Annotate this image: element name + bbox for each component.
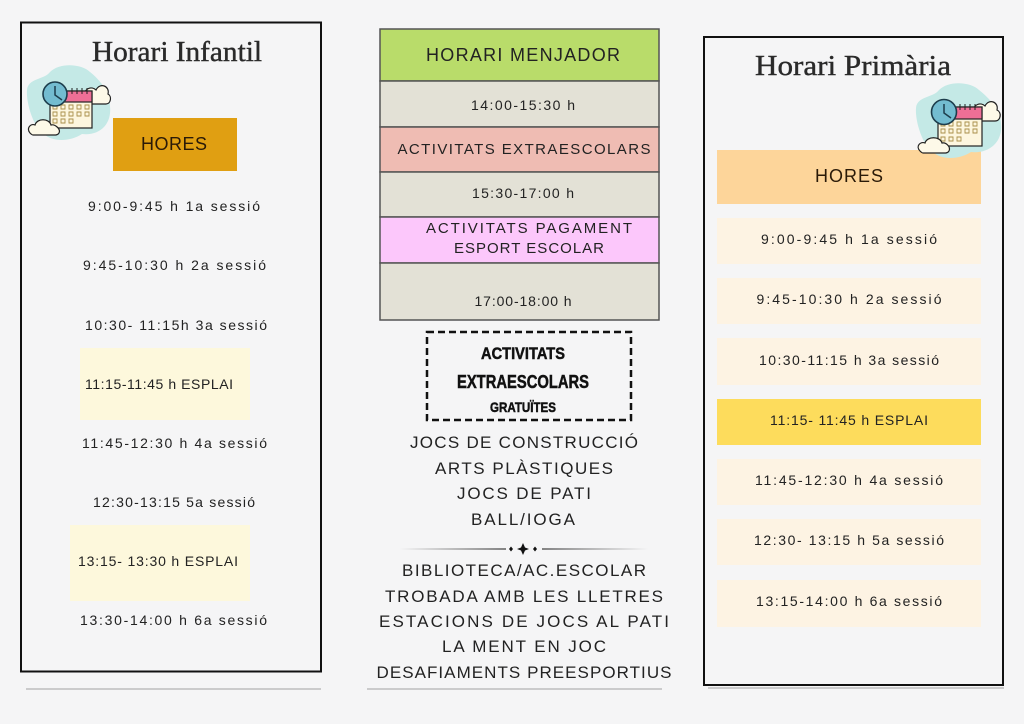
schedule: sessions (717, 218, 981, 627)
panel frame (21, 22, 321, 672)
schedule: sessions: 12:30-13:15 5a sessió (93, 494, 255, 510)
schedule: sessions: 11:15-11:45 h ESPLAI (85, 376, 233, 392)
schedule: sessions (70, 198, 267, 628)
schedule: sessions: 11:45-12:30 h 4a sessió (82, 435, 267, 451)
row: 15:30-17:00 h (380, 172, 659, 217)
row: 14:00-15:30 h: 14:00-15:30 h (471, 97, 575, 113)
icon: clock and calendar (916, 83, 1001, 158)
header: HORES: HORES (141, 134, 207, 154)
schedule: sessions: 13:30-14:00 h 6a sessió (80, 612, 267, 628)
text block: other activities: LA MENT EN JOC (442, 637, 606, 656)
schedule: sessions: 11:15- 11:45 h ESPLAI (770, 412, 928, 428)
text block: other activities: TROBADA AMB LES LLETRES (385, 587, 663, 606)
panel: Horari Menjador table (380, 29, 659, 320)
text block: free activities: BALL/IOGA (471, 510, 576, 529)
text block: other activities: BIBLIOTECA/AC.ESCOLAR (402, 561, 646, 580)
callout: Activitats extraescolars gratuïtes (427, 332, 631, 420)
panel: Horari Infantil (21, 22, 321, 672)
highlight: esplai (717, 399, 981, 445)
schedule: sessions: 12:30- 13:15 h 5a sessió (754, 532, 944, 548)
heading: Horari Infantil: Horari Infantil (92, 36, 262, 68)
row: 17:00-18:00 h (380, 263, 659, 320)
schedule: sessions: 9:45-10:30 h 2a sessió (756, 291, 942, 307)
schedule: sessions: 10:30- 11:15h 3a sessió (85, 317, 267, 333)
row: ACTIVITATS PAGAMENT ESPORT ESCOLAR (380, 217, 659, 263)
text block: other activities: DESAFIAMENTS PREESPORTIUS (376, 663, 672, 682)
text block: other activities: ESTACIONS DE JOCS AL PATI (379, 612, 669, 631)
callout: Activitats extraescolars gratuïtes: GRATUÏTES (490, 399, 556, 415)
schedule: sessions: 9:00-9:45 h 1a sessió (88, 198, 260, 214)
row: HORARI MENJADOR: HORARI MENJADOR (426, 45, 620, 65)
header: HORES: HORES (815, 166, 883, 186)
row: ACTIVITATS EXTRAESCOLARS: ACTIVITATS EXTRAESCOLARS (398, 141, 650, 158)
header: HORES (717, 150, 981, 204)
text block: free activities: JOCS DE PATI (457, 484, 591, 503)
divider ornament (400, 543, 648, 555)
text block: free activities: ARTS PLÀSTIQUES (435, 459, 613, 478)
row: ACTIVITATS EXTRAESCOLARS (380, 127, 659, 172)
row: HORARI MENJADOR (380, 29, 659, 81)
callout: Activitats extraescolars gratuïtes: ACTIVITATS (481, 344, 565, 363)
schedule: sessions: 13:15-14:00 h 6a sessió (756, 593, 942, 609)
heading: Horari Primària: Horari Primària (755, 50, 951, 82)
row: 17:00-18:00 h: 17:00-18:00 h (474, 293, 572, 309)
header: HORES (113, 118, 237, 171)
row: ACTIVITATS PAGAMENT ESPORT ESCOLAR: ESPORT ESCOLAR (454, 240, 604, 257)
row: ACTIVITATS PAGAMENT ESPORT ESCOLAR: ACTIVITATS PAGAMENT (426, 220, 632, 237)
highlight: esplai 1 (80, 348, 250, 420)
text block: other activities (376, 561, 672, 682)
icon: clock and calendar (27, 65, 110, 140)
text block: free activities (410, 433, 638, 529)
schedule: sessions: 9:45-10:30 h 2a sessió (83, 257, 266, 273)
panel frame (704, 37, 1003, 685)
schedule: sessions: 11:45-12:30 h 4a sessió (755, 472, 943, 488)
schedule: sessions: 13:15- 13:30 h ESPLAI (78, 553, 238, 569)
row: 15:30-17:00 h: 15:30-17:00 h (472, 185, 574, 201)
panel: Horari Primària (704, 37, 1003, 685)
highlight: esplai 2 (70, 525, 250, 601)
schedule: sessions: 10:30-11:15 h 3a sessió (759, 352, 939, 368)
row: 14:00-15:30 h (380, 81, 659, 127)
callout: Activitats extraescolars gratuïtes: EXTRAESCOLARS (457, 372, 589, 392)
schedule: sessions: 9:00-9:45 h 1a sessió (761, 231, 937, 247)
text block: free activities: JOCS DE CONSTRUCCIÓ (410, 433, 638, 452)
